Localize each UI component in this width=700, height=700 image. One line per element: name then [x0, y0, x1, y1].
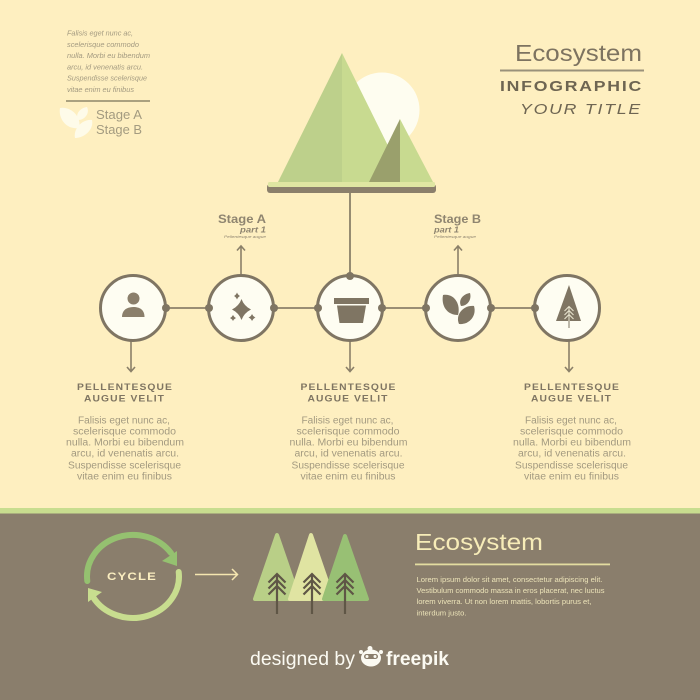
label: Stage A: part 1 [239, 226, 267, 234]
tree 3 [324, 536, 367, 599]
cycle label: CYCLE [107, 571, 157, 583]
bottom heading and text: Vestibulum commodo massa in eros placerat, nec luctus [416, 586, 605, 595]
top arc arrow [87, 535, 177, 581]
label: Stage A: Pellentesque augue [224, 234, 267, 239]
icon: freepik mascot [359, 646, 383, 666]
icon: legend leaves [60, 107, 92, 138]
intro text block: arcu, id venenatis arcu. [67, 62, 143, 72]
arrow: down from pot [346, 341, 354, 372]
text block: right column: Suspendisse scelerisque [515, 460, 628, 472]
node: leaves [422, 276, 495, 340]
bottom heading and text: lorem viverra. Ut non lorem mattis, lobortis purus et, [416, 597, 592, 606]
text block: left column [66, 382, 184, 482]
text block: center column: PELLENTESQUE [300, 382, 396, 393]
arrow: down from tree [565, 341, 573, 372]
node: person [100, 276, 170, 340]
label: Stage B [433, 212, 481, 239]
icon: leaves [443, 293, 475, 324]
text block: center column: AUGUE VELIT [308, 394, 388, 404]
text block: left column: Falisis eget nunc ac, [78, 416, 170, 426]
illustration: mountains and sun [267, 53, 436, 193]
footer brand [250, 646, 449, 670]
text block: right column: nulla. Morbi eu bibendum [513, 438, 631, 448]
text block: center column: arcu, id venenatis arcu. [294, 448, 402, 460]
arrow: up to Stage A [237, 246, 245, 275]
legend labels: Stage B [96, 123, 142, 137]
text block: left column: PELLENTESQUE [77, 382, 173, 393]
arrow: cycle to trees [195, 569, 238, 580]
text block: left column: nulla. Morbi eu bibendum [66, 438, 184, 448]
title: INFOGRAPHIC [500, 78, 643, 95]
tree 1 [255, 535, 299, 599]
legend labels: Stage A [96, 108, 143, 122]
label: Stage A: Stage A [218, 212, 266, 226]
bottom heading and text [415, 529, 610, 618]
label: Stage B: part 1 [433, 226, 460, 234]
title [500, 40, 644, 118]
intro text block: vitae enim eu finibus [67, 85, 134, 94]
icon: person [122, 292, 144, 317]
label: Stage B: Stage B [434, 212, 481, 226]
illustration: three trees [255, 535, 367, 614]
text block: center column: Suspendisse scelerisque [292, 460, 405, 472]
cycle diagram [87, 535, 179, 618]
intro text block: Falisis eget nunc ac, [67, 28, 133, 38]
icon: pine tree [556, 285, 581, 328]
text block: left column: AUGUE VELIT [84, 394, 165, 404]
text block: right column: PELLENTESQUE [524, 382, 620, 393]
bottom panel [0, 508, 700, 700]
bottom heading and text: Lorem ipsum dolor sit amet, consectetur adipiscing elit. [416, 575, 602, 584]
label: Stage B: Pellentesque augue [434, 234, 477, 239]
timeline connectors [166, 193, 534, 308]
footer brand: freepik [386, 649, 449, 670]
text block: right column: AUGUE VELIT [531, 394, 612, 404]
text block: left column: scelerisque commodo [73, 426, 176, 438]
label: Stage A [218, 212, 267, 239]
icon: sparkles [230, 292, 256, 321]
node: sparkle [205, 276, 278, 340]
text block: center column: vitae enim eu finibus [300, 472, 396, 482]
text block: center column [290, 382, 408, 482]
text block: center column: Falisis eget nunc ac, [302, 416, 394, 426]
intro text block: nulla. Morbi eu bibendum [67, 51, 150, 60]
title: Ecosystem [515, 40, 642, 66]
legend [60, 107, 143, 138]
tree trunks and branches [268, 574, 354, 614]
small mountain [369, 119, 433, 182]
bottom heading and text: interdum justo. [416, 608, 466, 618]
footer brand: designed by [250, 649, 356, 670]
text block: right column: arcu, id venenatis arcu. [518, 448, 626, 460]
legend labels [96, 108, 143, 137]
sun [344, 72, 420, 148]
text block: right column: scelerisque commodo [520, 426, 623, 438]
text block: right column [513, 382, 631, 482]
text block: left column: Suspendisse scelerisque [68, 460, 181, 472]
node: tree [531, 276, 600, 340]
intro text block [66, 28, 150, 102]
bottom heading and text: Ecosystem [415, 529, 543, 555]
text block: center column: scelerisque commodo [296, 426, 400, 438]
tree 2 [290, 535, 333, 599]
arrow: down from person [127, 341, 135, 372]
bottom arc arrow [88, 572, 179, 618]
intro text block: Suspendisse scelerisque [67, 74, 147, 82]
large mountain [278, 53, 406, 182]
text block: right column: vitae enim eu finibus [524, 472, 619, 482]
text block: right column: Falisis eget nunc ac, [525, 416, 617, 426]
platform [267, 182, 436, 193]
text block: left column: vitae enim eu finibus [77, 472, 172, 482]
arrow: up to Stage B [454, 246, 462, 275]
icon: plant pot [334, 298, 369, 323]
intro text block: scelerisque commodo [67, 40, 139, 49]
text block: left column: arcu, id venenatis arcu. [71, 448, 179, 460]
node: pot [314, 272, 386, 340]
text block: center column: nulla. Morbi eu bibendum [290, 438, 408, 448]
title: YOUR TITLE [520, 101, 642, 118]
